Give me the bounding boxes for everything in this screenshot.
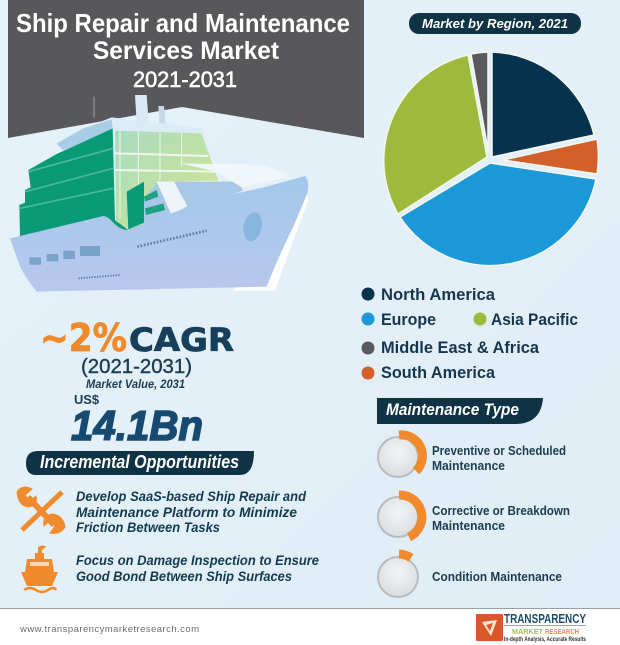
heading: maintenance type [377, 398, 543, 424]
title [16, 8, 350, 92]
icon: wrench and screwdriver [17, 487, 65, 533]
logo [476, 611, 587, 643]
logo: TRANSPARENCY [504, 611, 586, 626]
heading: market by region [409, 13, 581, 34]
label: corrective: Maintenance [432, 519, 505, 533]
slice: Europe [400, 163, 596, 266]
period: (2021-2031) [81, 356, 192, 378]
heading: maintenance type: Maintenance Type [386, 400, 519, 419]
legend: Middle East & Africa [381, 338, 540, 357]
opportunity text 2: Good Bond Between Ship Surfaces [76, 568, 292, 584]
label: preventive [432, 444, 566, 473]
CAGR stat: CAGR [129, 321, 234, 359]
market value: 14.1Bn [71, 402, 203, 449]
opportunity text 1: Maintenance Platform to Minimize [76, 504, 297, 520]
footer url: www.transparencymarketresearch.com [19, 624, 199, 635]
opportunity text 1: Friction Between Tasks [76, 519, 220, 535]
opportunity text 1 [76, 488, 306, 535]
gauge: preventive [378, 435, 422, 477]
slice: North America [492, 52, 594, 157]
opportunity text 2: Focus on Damage Inspection to Ensure [76, 552, 319, 568]
currency label: US$ [74, 392, 100, 407]
legend: South America [381, 363, 496, 382]
heading: market by region: Market by Region, 2021 [422, 16, 568, 31]
market value label: Market Value, 2031 [86, 377, 185, 391]
illustration: cruise ship [10, 95, 308, 292]
slice: Middle East and Africa [471, 52, 488, 150]
heading: incremental opportunities: Incremental Opportunities [40, 452, 239, 472]
logo: RESEARCH [545, 627, 579, 636]
label: preventive: Maintenance [432, 459, 505, 473]
slice: South America [503, 139, 598, 174]
logo: MARKET [512, 627, 543, 636]
gauge: corrective [378, 495, 422, 537]
title: 2021-2031 [133, 67, 237, 92]
CAGR stat [40, 316, 234, 360]
opportunity text 2 [76, 552, 319, 584]
legend: North America [381, 285, 496, 304]
slice: Asia Pacific [384, 55, 487, 214]
title: Ship Repair and Maintenance [16, 8, 350, 38]
header banner [8, 0, 364, 138]
legend: Europe [381, 310, 436, 329]
label: condition: Condition Maintenance [432, 570, 562, 584]
gauge: condition [378, 554, 418, 597]
title: Services Market [93, 37, 280, 65]
icon: ship [21, 546, 58, 592]
logo: In-depth Analysis, Accurate Results [504, 637, 587, 643]
CAGR stat: ~2% [40, 316, 127, 360]
legend [362, 285, 578, 382]
legend: Asia Pacific [491, 310, 578, 329]
pie chart: market by region [384, 52, 598, 266]
label: corrective [432, 504, 570, 533]
label: corrective: Corrective or Breakdown [432, 504, 570, 518]
label: preventive: Preventive or Scheduled [432, 444, 566, 458]
opportunity text 1: Develop SaaS-based Ship Repair and [76, 488, 306, 504]
